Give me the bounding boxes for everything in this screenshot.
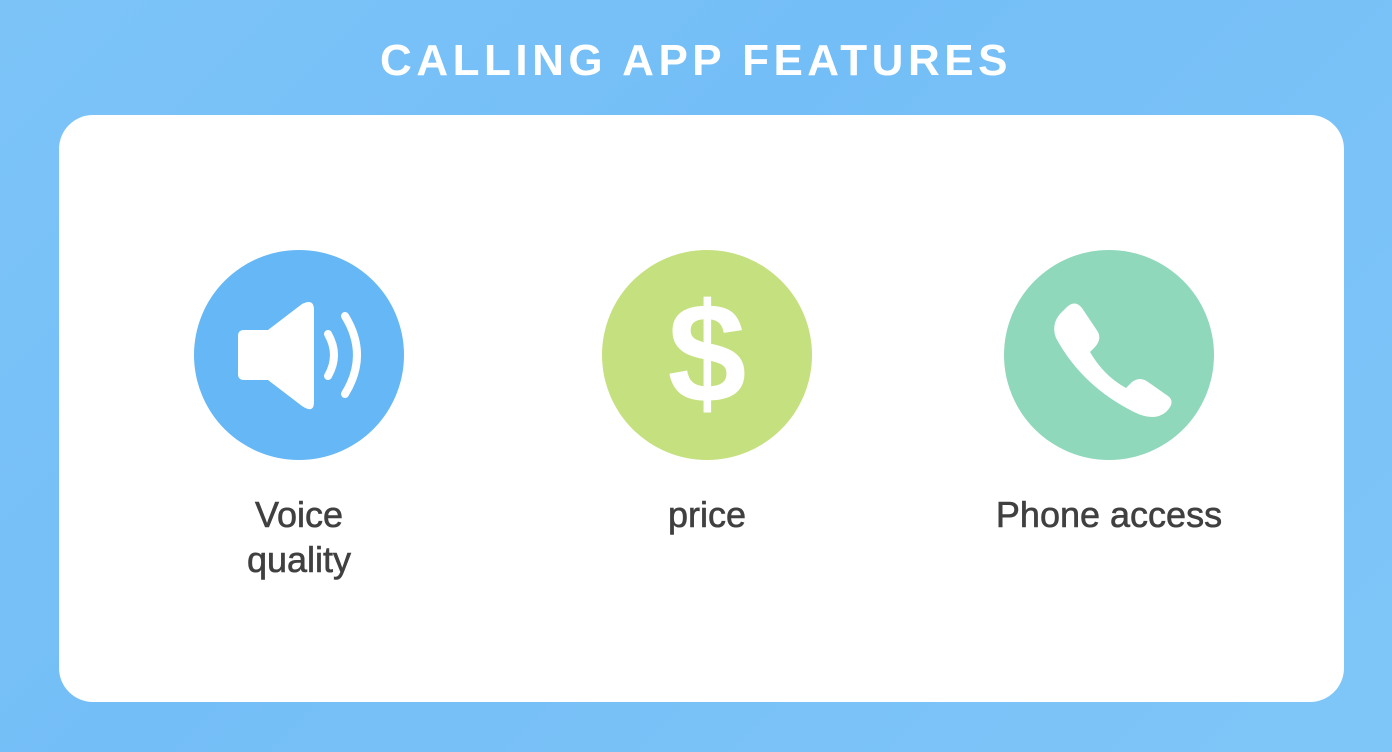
icon: dollar: $ [668, 274, 746, 433]
label: price: price [668, 494, 746, 535]
feature: voice quality [194, 250, 404, 580]
icon: dollar [602, 250, 812, 460]
icon: phone [1004, 250, 1214, 460]
icon: speaker [194, 250, 404, 460]
panel: features card [59, 115, 1344, 702]
label: voice quality: Voice [255, 494, 343, 535]
label: voice quality [247, 494, 352, 580]
label: phone access: Phone access [996, 494, 1222, 535]
feature: phone access [996, 250, 1222, 535]
title: CALLING APP FEATURES [380, 36, 1012, 85]
label: voice quality: quality [247, 539, 351, 580]
feature: price [602, 250, 812, 535]
